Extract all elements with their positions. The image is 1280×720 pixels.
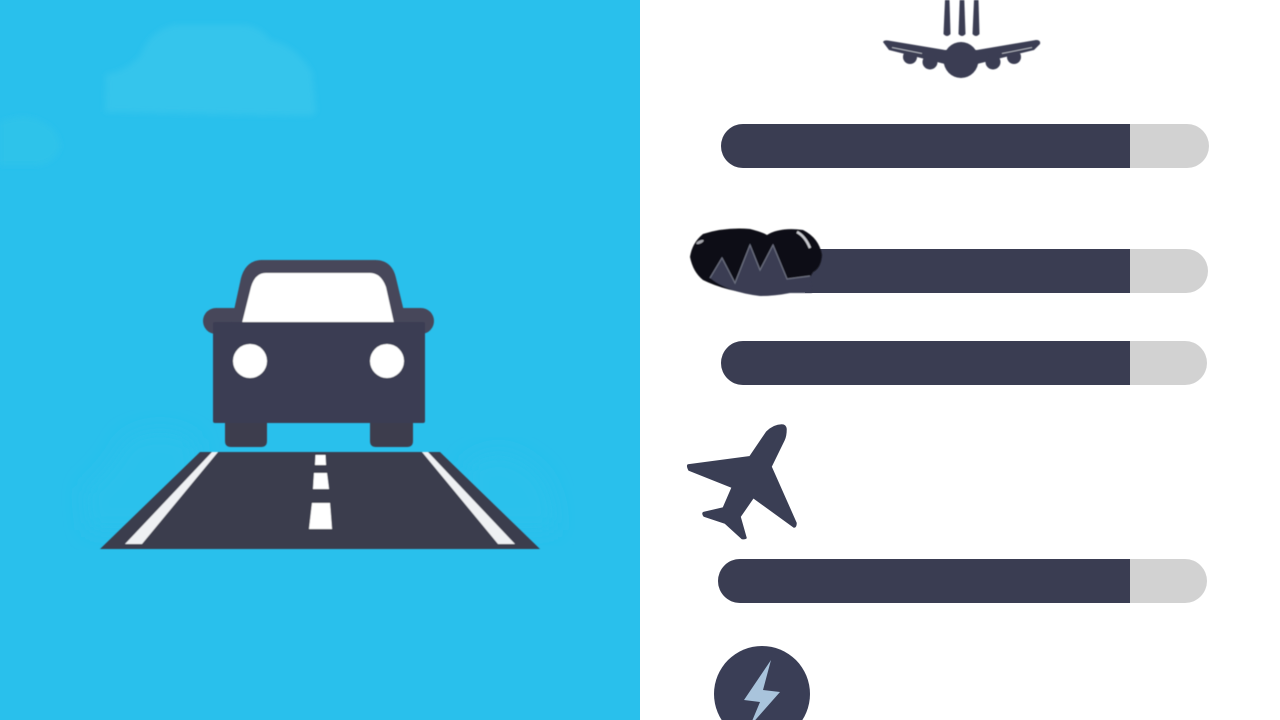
bar 4 track [718,559,1207,603]
progress bar 1 [721,124,1209,168]
bar 3 fill [721,341,1130,385]
jagged outline [710,245,810,283]
icon: aircraft front view with streaks [883,0,1040,78]
panel background: white [640,0,1280,720]
streak centre [958,0,966,36]
bar 4 fill [718,559,1130,603]
car mirrors [203,308,434,334]
streak right [972,0,980,36]
bar 1 fill [721,124,1130,168]
blob body [690,229,822,295]
cloud: small left [0,117,60,165]
progress bar 4 [718,559,1207,603]
panel: blue sky with car and road [0,0,640,720]
centre dash: far [315,455,326,465]
right lane line [422,452,515,544]
right wheel [370,423,413,447]
streak left [944,0,950,36]
bar 2 fill [805,249,1130,293]
progress bar 3 [721,341,1207,385]
icon: aircraft top view [688,425,796,539]
jagged lower section [710,245,812,296]
left lane line [125,452,218,544]
cloud: faint lower left [84,430,205,530]
blob highlight left [696,239,704,245]
engine outer right [1007,50,1021,64]
fuselage [944,42,978,78]
wing highlight right [1002,48,1032,54]
wing highlight left [892,48,922,54]
lightning bolt [744,660,780,720]
blob highlight right [797,232,810,248]
centre dash: near [309,503,332,529]
panel background: blue [0,0,640,720]
cloud: large upper [105,25,316,116]
engine inner left [922,54,938,70]
progress bar 2 [800,249,1208,293]
car roof [231,260,407,324]
car windshield [242,273,394,323]
road surface [100,452,540,549]
bar 2 track [800,249,1208,293]
centre dash: middle [313,473,329,489]
icon: black blob with jagged line [690,229,822,296]
engine outer left [903,50,917,64]
cloud: faint lower right [465,452,556,530]
wings [883,40,1040,64]
icon: road [100,452,540,549]
bar 3 track [721,341,1207,385]
panel: white with aircraft and progress bars [640,0,1280,720]
engine inner right [986,54,1000,70]
icon: car front view [203,260,434,447]
bar 1 track [721,124,1209,168]
right headlight [370,344,404,378]
badge circle [714,646,810,720]
left headlight [233,344,267,378]
icon: lightning bolt badge [714,646,810,720]
car body [213,322,425,423]
left wheel [225,423,267,447]
